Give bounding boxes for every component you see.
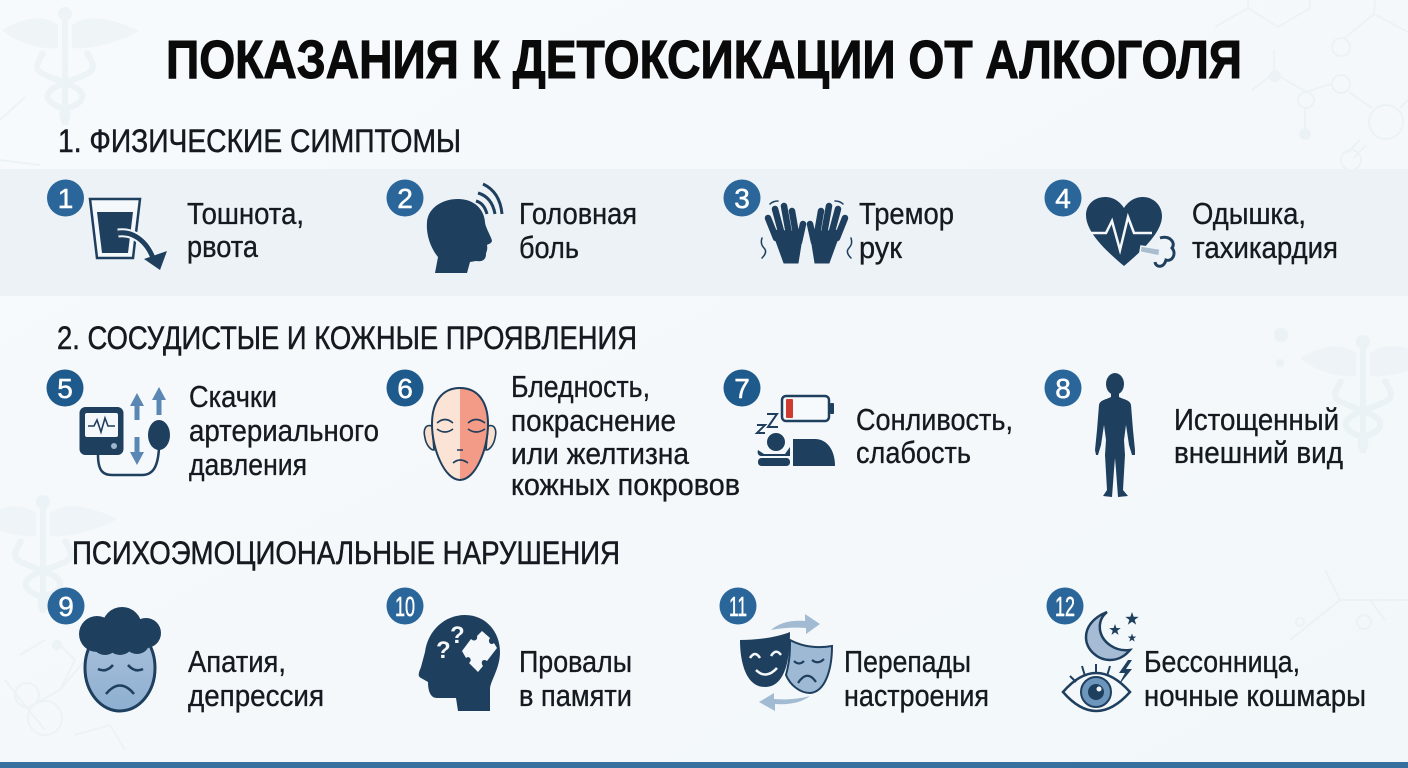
- badge 8: 8: [1055, 373, 1071, 404]
- heading: section 1: 1. ФИЗИЧЕСКИЕ СИМПТОМЫ: [58, 123, 461, 159]
- badge 2: [386, 180, 424, 216]
- heading: section 3: ПСИХОЭМОЦИОНАЛЬНЫЕ НАРУШЕНИЯ: [72, 535, 620, 571]
- text: skin colour: [511, 369, 740, 502]
- icon: trembling hands: [761, 201, 852, 263]
- badge 7: [724, 370, 760, 406]
- text: emaciated look: [1174, 402, 1343, 470]
- text: skin colour: Бледность,: [511, 369, 650, 404]
- text: blood pressure: давления: [189, 447, 307, 482]
- text: shortness of breath: тахикардия: [1192, 230, 1338, 265]
- title: ПОКАЗАНИЯ К ДЕТОКСИКАЦИИ ОТ АЛКОГОЛЯ: [166, 30, 1242, 90]
- icon: glass with vomit arrow: [90, 199, 167, 270]
- item 5: blood pressure: [46, 370, 379, 482]
- text: memory lapses: в памяти: [519, 678, 632, 713]
- badge 12: 12: [1055, 591, 1075, 622]
- bottom bar: [0, 762, 1408, 768]
- text: headache: [519, 196, 637, 265]
- text: drowsiness: Сонливость,: [856, 402, 1013, 437]
- text: blood pressure: артериального: [189, 413, 379, 448]
- text: emaciated look: Истощенный: [1174, 402, 1339, 437]
- text: headache: Головная: [519, 196, 637, 231]
- icon: sad face under cloud: [79, 607, 161, 711]
- badge 8: [1044, 370, 1082, 406]
- icon: theatre masks with arrows: [740, 614, 832, 711]
- text: headache: боль: [519, 230, 579, 265]
- text: nausea: рвота: [187, 229, 259, 264]
- item 12: insomnia: [1046, 588, 1366, 713]
- badge 3: 3: [734, 183, 750, 214]
- text: skin colour: или желтизна: [511, 436, 690, 471]
- text: skin colour: покраснение: [511, 403, 676, 438]
- icon: head with puzzle: ?: [450, 622, 465, 649]
- badge 4: [1044, 180, 1082, 216]
- badge 10: 10: [395, 591, 415, 622]
- text: mood swings: настроения: [844, 678, 989, 713]
- icon: thin body silhouette: [1095, 373, 1135, 497]
- badge 6: 6: [397, 373, 413, 404]
- text: shortness of breath: [1192, 196, 1338, 265]
- item 4: shortness of breath: [1044, 180, 1338, 266]
- icon: head with puzzle: ?: [436, 637, 451, 664]
- text: memory lapses: [519, 644, 632, 713]
- icon: blood pressure monitor: [80, 387, 170, 475]
- text: hand tremor: [859, 196, 954, 265]
- badge 2: 2: [397, 183, 413, 214]
- icon: head with puzzle: [419, 615, 500, 711]
- badge 11: 11: [729, 591, 747, 622]
- badge 9: 9: [58, 591, 74, 622]
- text: skin colour: кожных покровов: [511, 467, 740, 502]
- icon: head with pain waves: [427, 184, 502, 273]
- item 7: drowsiness: [724, 370, 1013, 470]
- panel: physical symptoms band: [0, 169, 1408, 296]
- item 6: skin colour: [386, 369, 740, 502]
- badge 12: [1046, 588, 1084, 624]
- badge 6: [386, 370, 424, 406]
- text: apathy: депрессия: [188, 678, 324, 713]
- badge 5: [46, 370, 84, 406]
- item 11: mood swings: [720, 588, 989, 713]
- text: mood swings: [844, 644, 989, 713]
- badge 10: [386, 588, 424, 624]
- badge 3: [724, 180, 760, 216]
- text: insomnia: ночные кошмары: [1144, 678, 1366, 713]
- text: nausea: Тошнота,: [187, 196, 304, 231]
- badge 4: 4: [1055, 183, 1071, 214]
- icon: heart with pulse and breath: [1086, 197, 1174, 266]
- text: hand tremor: Тремор: [859, 196, 954, 231]
- badge 9: [48, 588, 84, 624]
- item 3: hand tremor: [724, 180, 954, 265]
- text: hand tremor: рук: [859, 230, 902, 265]
- badge 1: 1: [58, 183, 73, 214]
- text: blood pressure: [189, 379, 379, 482]
- text: apathy: [188, 644, 324, 713]
- item 10: memory lapses: [386, 588, 632, 713]
- item 8: emaciated look: [1044, 370, 1343, 497]
- text: insomnia: [1144, 644, 1366, 713]
- text: memory lapses: Провалы: [519, 644, 632, 679]
- badge 5: 5: [57, 373, 73, 404]
- heading: section 2: 2. СОСУДИСТЫЕ И КОЖНЫЕ ПРОЯВЛЕНИЯ: [57, 320, 637, 356]
- item 2: headache: [386, 180, 637, 273]
- text: shortness of breath: Одышка,: [1192, 196, 1306, 231]
- text: nausea: [187, 196, 304, 264]
- text: drowsiness: слабость: [856, 435, 971, 470]
- icon: two-tone face: [424, 388, 496, 480]
- icon: low battery and sleeping person: [757, 396, 835, 466]
- text: blood pressure: Скачки: [189, 379, 277, 414]
- item 1: nausea: [47, 180, 304, 270]
- item 9: apathy: [48, 588, 324, 713]
- badge 11: [720, 588, 756, 624]
- badge 1: [47, 180, 84, 216]
- text: apathy: Апатия,: [188, 644, 286, 679]
- text: drowsiness: [856, 402, 1013, 470]
- text: mood swings: Перепады: [844, 644, 971, 679]
- badge 7: 7: [734, 373, 750, 404]
- text: emaciated look: внешний вид: [1174, 435, 1343, 470]
- icon: moon, stars and eye: [1063, 612, 1139, 711]
- text: insomnia: Бессонница,: [1144, 644, 1300, 679]
